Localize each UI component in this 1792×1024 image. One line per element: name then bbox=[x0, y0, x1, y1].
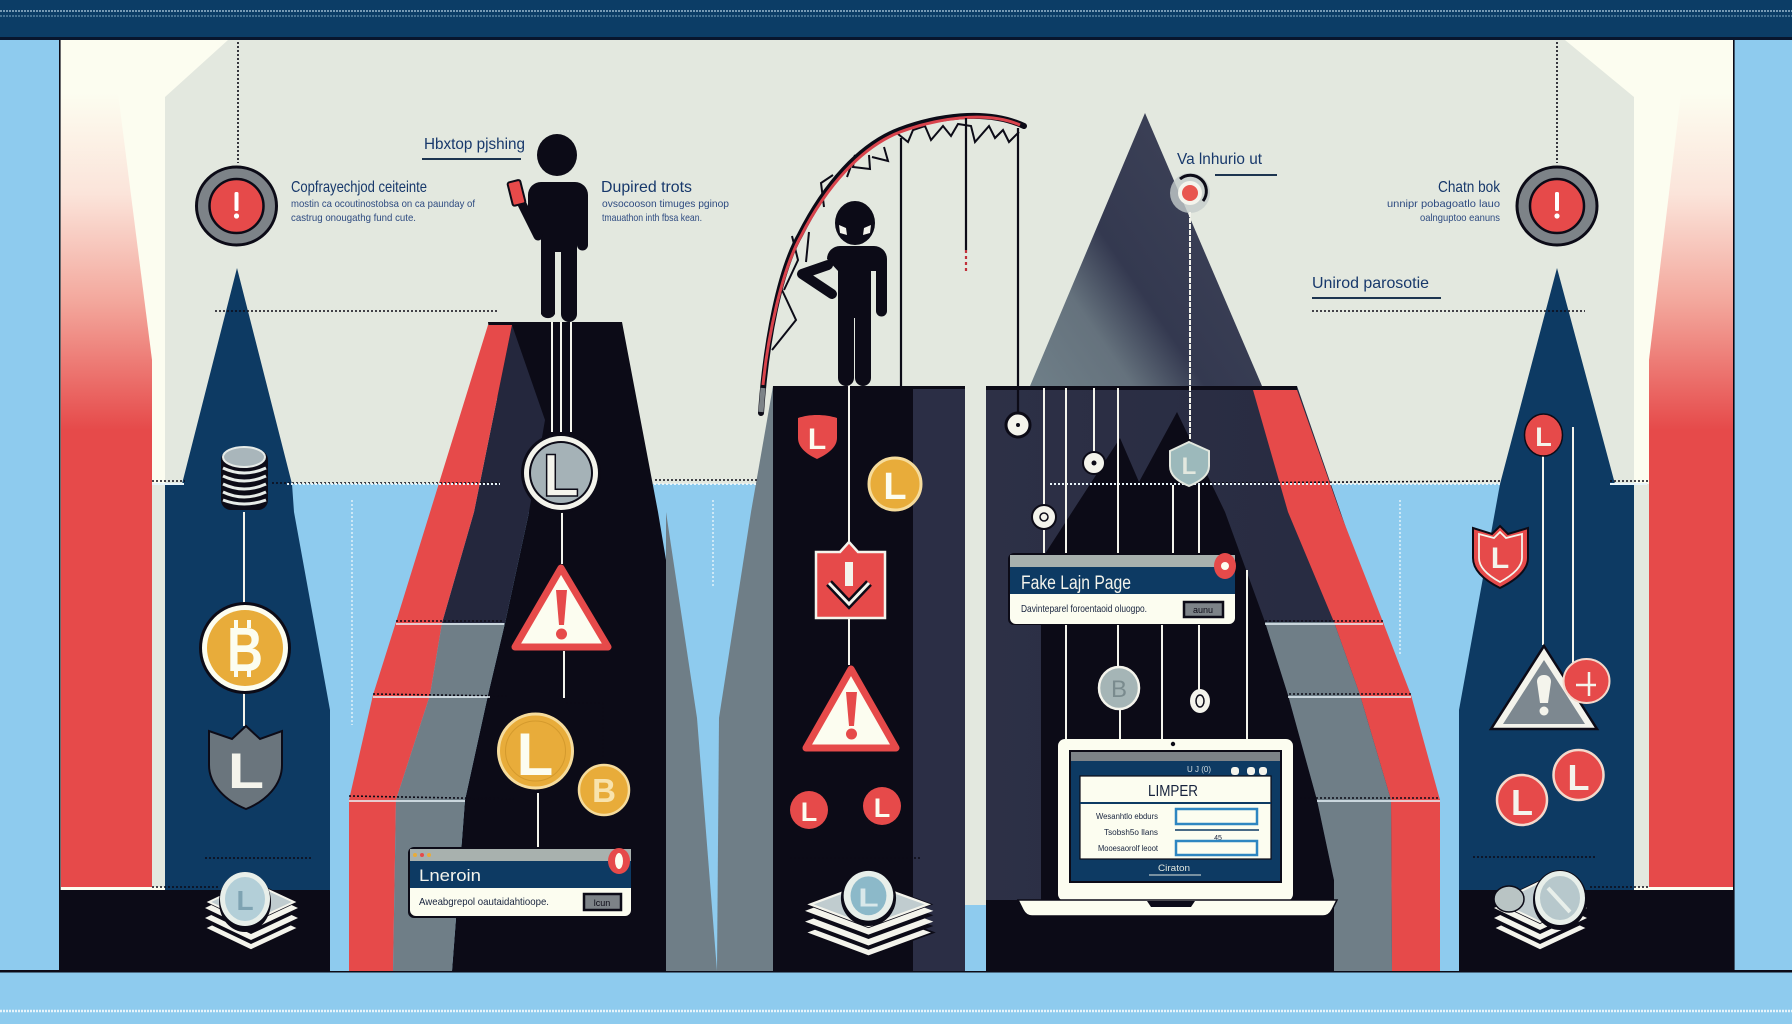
fishing rod bbox=[761, 116, 1024, 413]
icon: red shield: L bbox=[808, 423, 826, 456]
icon: money stack left bbox=[205, 872, 298, 950]
icon: red coin lower right bbox=[1554, 750, 1604, 800]
icon: red shield right bbox=[1473, 526, 1528, 588]
heading: unintended bbox=[1312, 275, 1441, 299]
icon: small bitcoin bbox=[579, 765, 629, 815]
left navy spire bbox=[165, 268, 330, 890]
popup: link coin: Lneroin bbox=[419, 866, 481, 885]
icon: small bitcoin: B bbox=[592, 772, 616, 809]
node: upper bbox=[1083, 452, 1105, 474]
icon: grey warning triangle bbox=[1491, 646, 1597, 729]
icon: teal shield bbox=[1170, 442, 1209, 486]
icon: gold coin: L bbox=[883, 466, 907, 508]
login form: LIMPER bbox=[1148, 783, 1198, 800]
icon: red shield right: L bbox=[1491, 542, 1509, 575]
icon: red coin lower left bbox=[1497, 775, 1547, 825]
icon: red badge left bbox=[790, 791, 828, 829]
text block: copy: castrug onougathg fund cute. bbox=[291, 212, 416, 224]
icon: red badge right: L bbox=[874, 793, 890, 823]
figure: victim bbox=[507, 134, 588, 322]
text block: copy bbox=[291, 179, 475, 224]
popup: fake login page: Fake Lajn Page bbox=[1021, 573, 1131, 594]
laptop bbox=[1018, 739, 1337, 916]
top banner bbox=[0, 0, 1792, 40]
icon: money stack centre bbox=[805, 870, 933, 956]
cords under victim bbox=[552, 322, 571, 432]
text block: duplicated: tmauathon inth fbsa kean. bbox=[602, 212, 702, 224]
text block: duplicated: Dupired trots bbox=[601, 179, 692, 196]
left red curtain bbox=[61, 93, 152, 887]
fishing lines bbox=[901, 118, 1018, 415]
heading: hotkey phishing bbox=[422, 136, 525, 160]
icon: silver coin: B bbox=[1111, 676, 1127, 703]
icon: bitcoin coin: B bbox=[227, 616, 263, 685]
text block: check: unnipr pobagoatlo lauo bbox=[1387, 198, 1500, 210]
icon: silver litecoin: L bbox=[543, 442, 579, 509]
icon: money stack right bbox=[1494, 870, 1587, 950]
icon: red badge top right: L bbox=[1535, 422, 1552, 452]
right red curtain bbox=[1649, 93, 1733, 887]
right navy spire bbox=[1459, 268, 1634, 890]
popup: link coin bbox=[408, 847, 633, 918]
popup: link coin: Aweabgrepol oautaidahtioope. bbox=[419, 896, 549, 908]
icon: bitcoin coin bbox=[199, 602, 291, 694]
heading: login bbox=[1177, 151, 1277, 176]
pedestal left bbox=[349, 322, 717, 971]
right black base bbox=[1459, 890, 1733, 971]
login form: Tsobsh5o llans bbox=[1104, 828, 1158, 837]
left black base bbox=[60, 890, 330, 971]
laptop: U J (0) bbox=[1187, 765, 1211, 774]
icon: red badge right bbox=[863, 787, 901, 825]
text block: check: oalnguptoo eanuns bbox=[1420, 212, 1500, 224]
popup: fake login page bbox=[1008, 553, 1237, 625]
icon: money stack left: L bbox=[236, 885, 254, 916]
icon: silver coin bbox=[1099, 667, 1139, 709]
pedestal right bbox=[986, 386, 1440, 971]
text block: duplicated bbox=[601, 179, 729, 224]
login form bbox=[1080, 776, 1271, 859]
icon: gold coin bbox=[869, 458, 921, 510]
popup: fake login page: aunu bbox=[1193, 605, 1213, 615]
icon: gold litecoin bbox=[498, 714, 572, 788]
icon: red badge left: L bbox=[801, 797, 817, 827]
text block: check bbox=[1387, 179, 1501, 224]
login form: Wesanhtlo ebdurs bbox=[1096, 812, 1158, 821]
pedestal centre bbox=[717, 386, 986, 971]
icon: grey shield: L bbox=[228, 743, 264, 799]
alert badge left bbox=[196, 167, 276, 245]
popup: link coin: lcun bbox=[594, 898, 610, 908]
icon: red coin lower right: L bbox=[1568, 757, 1590, 798]
heading: hotkey phishing: Hbxtop pjshing bbox=[424, 136, 525, 153]
icon: warning triangle centre bbox=[806, 669, 896, 748]
grey mountain bbox=[1030, 113, 1262, 386]
alert badge right bbox=[1517, 167, 1597, 245]
icon: location pin bbox=[1170, 173, 1210, 440]
icon: coin stack bbox=[221, 447, 268, 510]
icon: red cross badge bbox=[1564, 659, 1610, 703]
laptop: Ciraton bbox=[1158, 863, 1190, 873]
icon: warning triangle bbox=[515, 568, 608, 647]
popup: fake login page: Davinteparel foroentaoid oluogpo. bbox=[1021, 603, 1147, 615]
icon: red shield bbox=[798, 415, 837, 459]
bottom band bbox=[0, 970, 1792, 1024]
text block: copy: mostin ca ocoutinostobsa on ca paunday of bbox=[291, 198, 475, 210]
heading: login: Va lnhurio ut bbox=[1177, 151, 1263, 168]
node: rod end bbox=[1006, 413, 1030, 437]
login form: Mooesaorolf leoot bbox=[1098, 844, 1159, 853]
icon: red coin lower left: L bbox=[1511, 782, 1533, 823]
icon: silver litecoin bbox=[521, 433, 601, 513]
dotted guide lines bbox=[152, 42, 1650, 887]
login form: 45 bbox=[1214, 835, 1222, 842]
text block: check: Chatn bok bbox=[1438, 179, 1501, 196]
icon: teal shield: L bbox=[1182, 453, 1196, 480]
node: small coin bbox=[1190, 689, 1210, 713]
white dotted accents bbox=[152, 484, 1647, 801]
figure: hacker bbox=[802, 201, 887, 386]
text block: copy: Copfrayechjod ceiteinte bbox=[291, 179, 427, 196]
icon: red badge top right bbox=[1524, 414, 1562, 456]
text block: duplicated: ovsocooson timuges pginop bbox=[602, 198, 729, 210]
node: lower bbox=[1032, 505, 1056, 529]
icon: gold litecoin: L bbox=[517, 721, 553, 788]
icon: red download box bbox=[816, 542, 885, 618]
icon: grey shield bbox=[209, 726, 282, 809]
cord columns bbox=[244, 386, 1573, 848]
icon: money stack centre: L bbox=[858, 884, 879, 913]
heading: unintended: Unirod parosotie bbox=[1312, 275, 1429, 292]
